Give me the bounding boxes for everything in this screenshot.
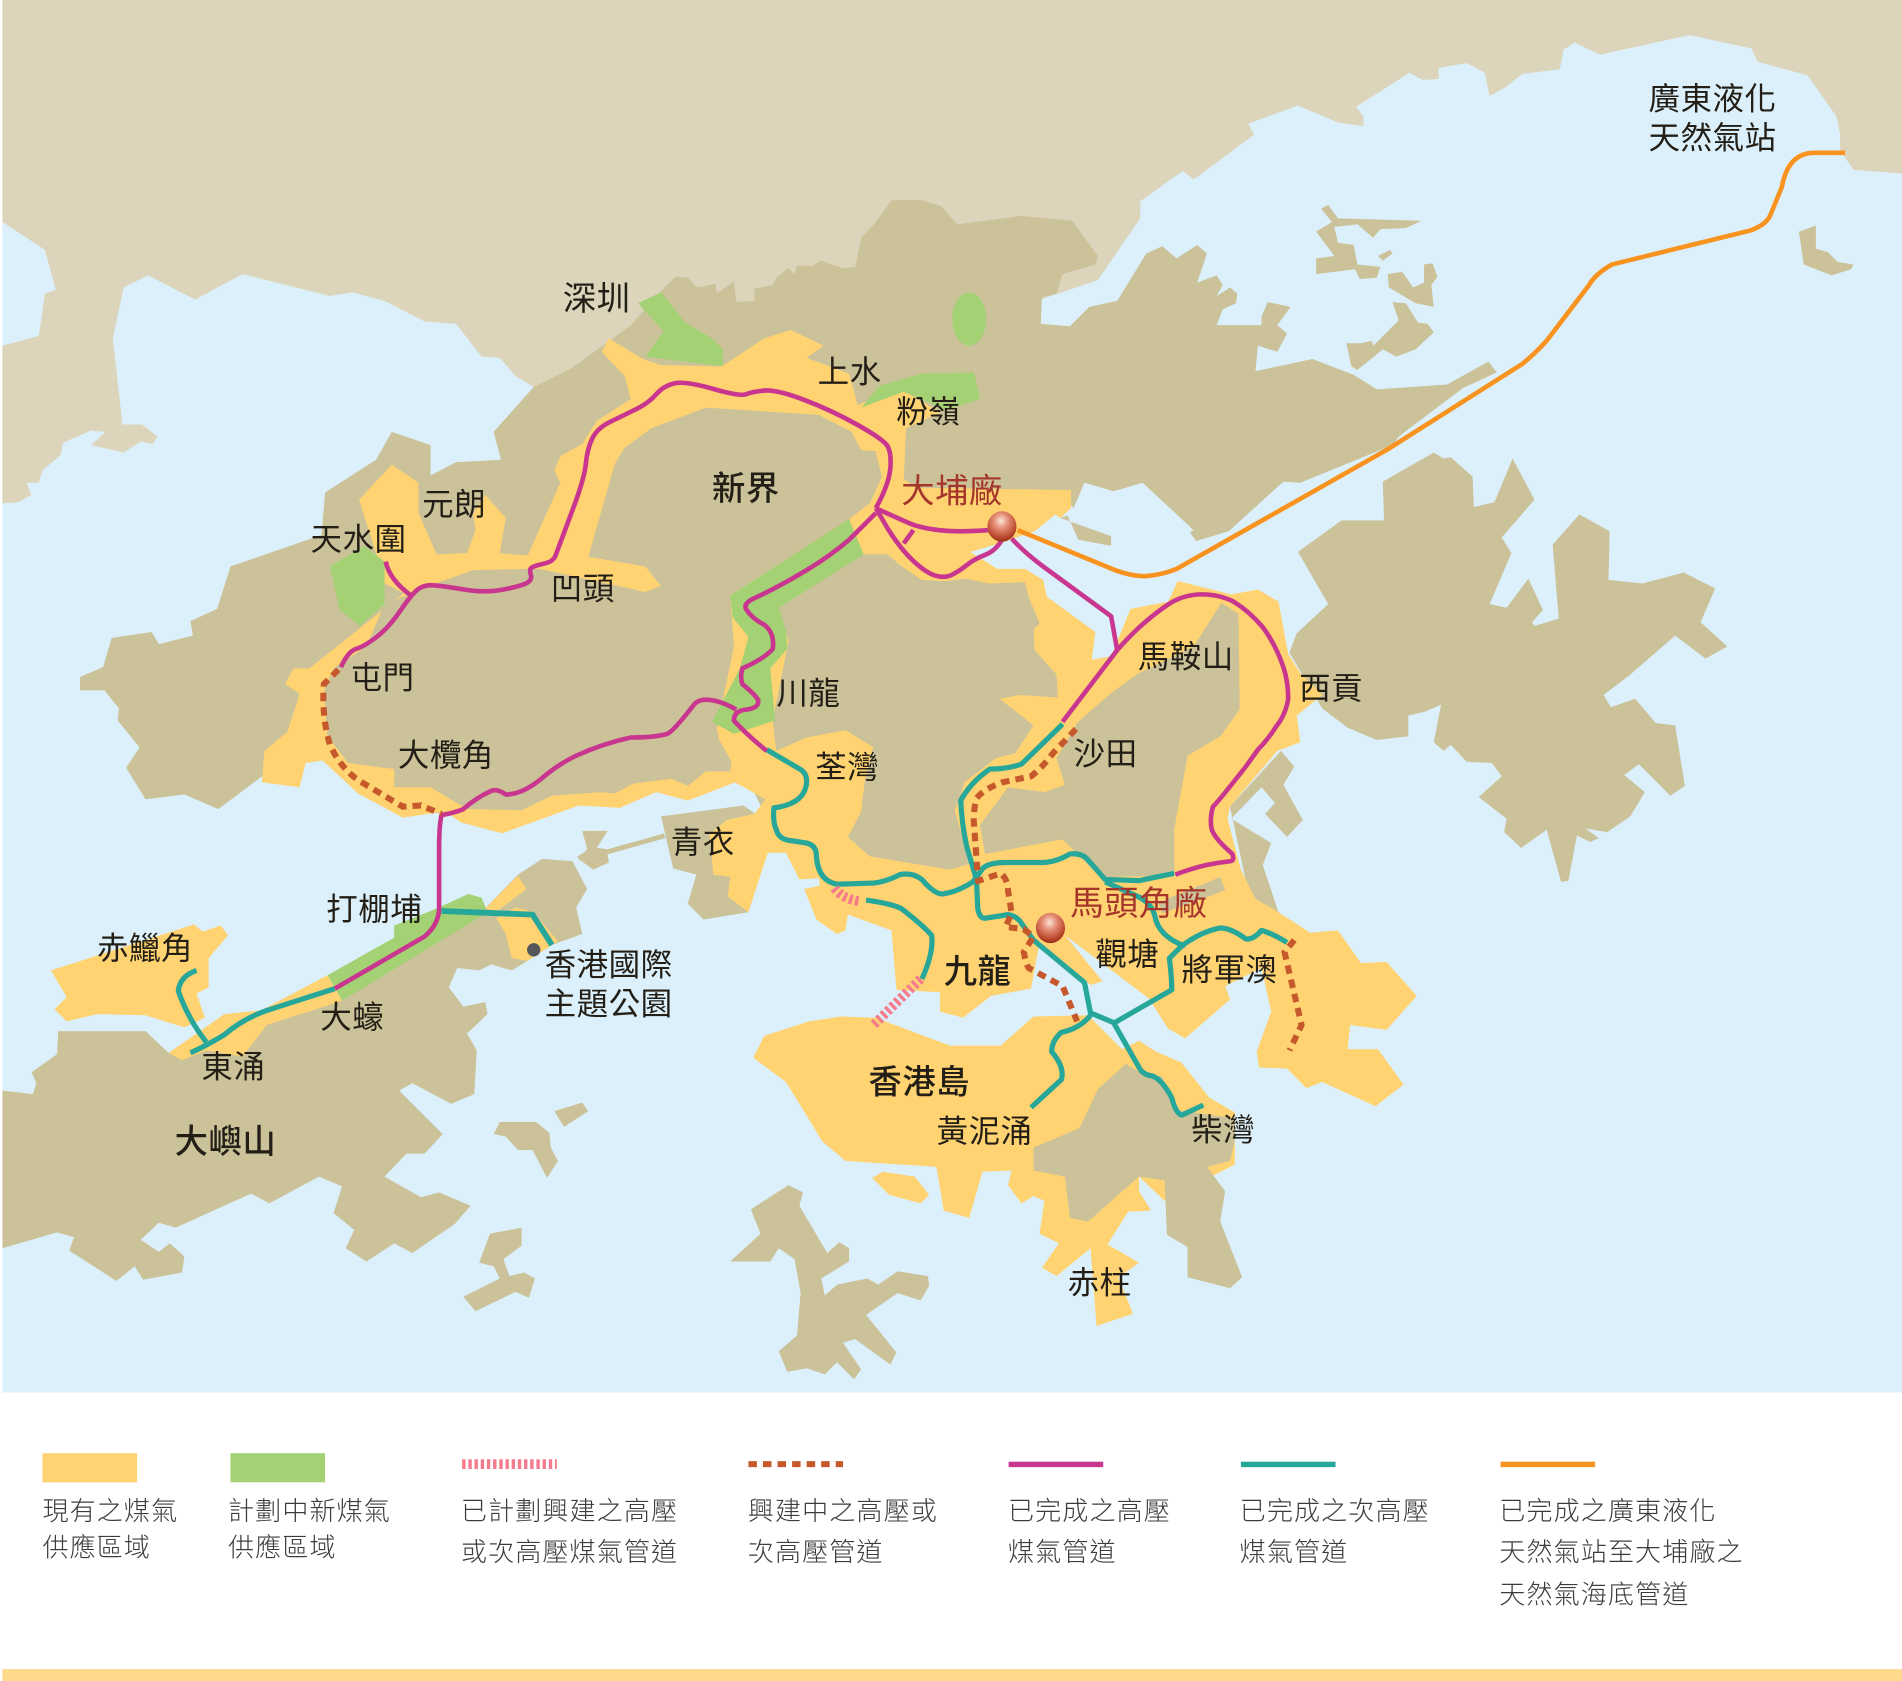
land: north-east islands	[1316, 205, 1853, 370]
map place labels: 馬頭角廠	[1070, 885, 1208, 923]
map place labels: 屯門	[351, 659, 415, 695]
legend item: planned pipeline	[461, 1464, 678, 1567]
area: Chek Lap Kok	[51, 924, 228, 1027]
map place labels: 天然氣站	[1648, 119, 1776, 155]
area: Tung Chung strip	[169, 975, 342, 1060]
panel: mainland China land	[2, 0, 1902, 503]
legend item: sub-high pressure pipeline: 已完成之次高壓	[1240, 1496, 1430, 1526]
map place labels	[97, 81, 1776, 1301]
pipeline: sub-high pressure completed (teal)	[178, 724, 1287, 1115]
legend item: submarine gas pipeline: 天然氣海底管道	[1499, 1580, 1689, 1610]
area: Tin Shui Wai	[330, 546, 385, 626]
land: Tolo Harbour islet	[1060, 516, 1111, 546]
bottom band	[2, 1669, 1902, 1681]
land: central New Territories	[773, 554, 1058, 870]
map place labels: 川龍	[776, 675, 840, 711]
icon: Tai Po plant marker	[987, 511, 1017, 542]
map place labels: 西貢	[1299, 670, 1363, 706]
legend item: existing supply area: 現有之煤氣	[42, 1496, 178, 1526]
map place labels: 香港島	[869, 1064, 970, 1101]
legend item: existing supply area: 供應區域	[42, 1532, 151, 1562]
area: New Territories and Kowloon	[262, 330, 1417, 1106]
map place labels: 沙田	[1074, 736, 1138, 772]
area: Sunny Bay strip	[485, 876, 526, 911]
map place labels: 深圳	[563, 281, 631, 318]
icon: Ma Tau Kok plant marker	[1036, 913, 1065, 943]
panel: Hong Kong land masses	[2, 200, 1853, 1379]
legend item: submarine gas pipeline: 天然氣站至大埔廠之	[1499, 1537, 1744, 1567]
land: Lamma Island	[730, 1185, 929, 1379]
map place labels: 荃灣	[815, 749, 879, 785]
map place labels: 大蠔	[320, 999, 384, 1035]
icon: theme park dot	[527, 943, 540, 956]
legend item: high pressure pipeline	[1008, 1462, 1171, 1567]
legend item: high pressure pipeline: 已完成之高壓	[1008, 1496, 1171, 1526]
legend item: planned pipeline: 或次高壓煤氣管道	[461, 1537, 678, 1567]
land: New Territories	[80, 200, 1497, 904]
land: Clear Water Bay peninsula	[1230, 751, 1303, 912]
panel: planned gas supply areas	[328, 292, 986, 1001]
legend item: sub-high pressure pipeline: 煤氣管道	[1240, 1537, 1348, 1567]
area: Fanling	[861, 372, 980, 410]
map place labels: 黃泥涌	[936, 1113, 1032, 1149]
map place labels: 柴灣	[1191, 1112, 1255, 1148]
legend item: planned supply area	[228, 1453, 391, 1562]
map place labels: 天水圍	[311, 521, 407, 557]
map place labels: 赤柱	[1067, 1265, 1131, 1301]
map place labels: 青衣	[671, 824, 735, 860]
map place labels: 元朗	[422, 486, 486, 522]
area: Tsuen Wan corridor	[712, 519, 864, 734]
legend item: submarine gas pipeline: 已完成之廣東液化	[1499, 1496, 1717, 1526]
legend item: planned supply area: 供應區域	[228, 1532, 337, 1562]
legend item: submarine gas pipeline	[1499, 1462, 1744, 1610]
map place labels: 新界	[712, 471, 780, 508]
legend item: planned pipeline: 已計劃興建之高壓	[461, 1496, 678, 1526]
area: Lantau north	[328, 894, 488, 1001]
pipeline: submarine natural gas (orange)	[1018, 153, 1845, 576]
land: Lantau Island	[2, 859, 587, 1281]
land: small southern islands	[463, 1103, 588, 1311]
map place labels: 廣東液化	[1648, 81, 1776, 117]
area: theme park	[496, 907, 558, 961]
map place labels: 香港國際	[545, 947, 673, 983]
map place labels: 大欖角	[398, 737, 494, 773]
legend item: under-construction pipeline: 興建中之高壓或	[748, 1496, 938, 1526]
map place labels: 大埔廠	[901, 474, 1003, 511]
land: Kwun Tong hill	[1158, 877, 1225, 913]
map place labels: 馬鞍山	[1138, 639, 1234, 675]
map place labels: 觀塘	[1095, 936, 1159, 972]
map place labels: 赤鱲角	[97, 930, 193, 966]
map place labels: 主題公園	[545, 986, 673, 1022]
map place labels: 東涌	[201, 1049, 265, 1085]
map place labels: 上水	[818, 354, 882, 390]
legend item: planned supply area: 計劃中新煤氣	[228, 1496, 391, 1526]
legend item: sub-high pressure pipeline	[1240, 1462, 1430, 1567]
land: west New Territories interior	[324, 408, 882, 810]
map place labels: 九龍	[944, 954, 1011, 991]
legend item: existing supply area	[42, 1453, 178, 1562]
land: Ma On Shan	[980, 603, 1240, 877]
area: north-east oval	[952, 292, 986, 346]
map place labels: 凹頭	[551, 571, 615, 607]
legend	[42, 1453, 1744, 1610]
land: Tsing Yi	[661, 805, 757, 919]
map place labels: 大嶼山	[175, 1124, 276, 1161]
area: small island south of Hong Kong Island	[872, 1172, 929, 1203]
land: east Hong Kong Island	[1033, 1064, 1242, 1288]
pipeline: high pressure completed (magenta)	[335, 383, 1288, 989]
map place labels: 粉嶺	[896, 394, 960, 430]
map place labels: 將軍澳	[1181, 952, 1277, 988]
pipeline: planned (pink hatched)	[835, 888, 921, 1025]
land: Sai Kung east	[1289, 452, 1727, 882]
area: Shenzhen border	[638, 292, 723, 366]
panel: existing gas supply areas	[51, 330, 1417, 1326]
land: Ma Wan and bridge	[579, 831, 665, 870]
legend item: under-construction pipeline	[748, 1464, 938, 1567]
pipeline: under construction (dashed brown)	[323, 670, 1302, 1050]
legend item: under-construction pipeline: 次高壓管道	[748, 1537, 884, 1567]
area: Hong Kong Island	[753, 1015, 1235, 1326]
panel: inner land above supply areas	[324, 408, 1242, 1288]
map place labels: 打棚埔	[326, 891, 422, 927]
legend item: high pressure pipeline: 煤氣管道	[1008, 1537, 1117, 1567]
